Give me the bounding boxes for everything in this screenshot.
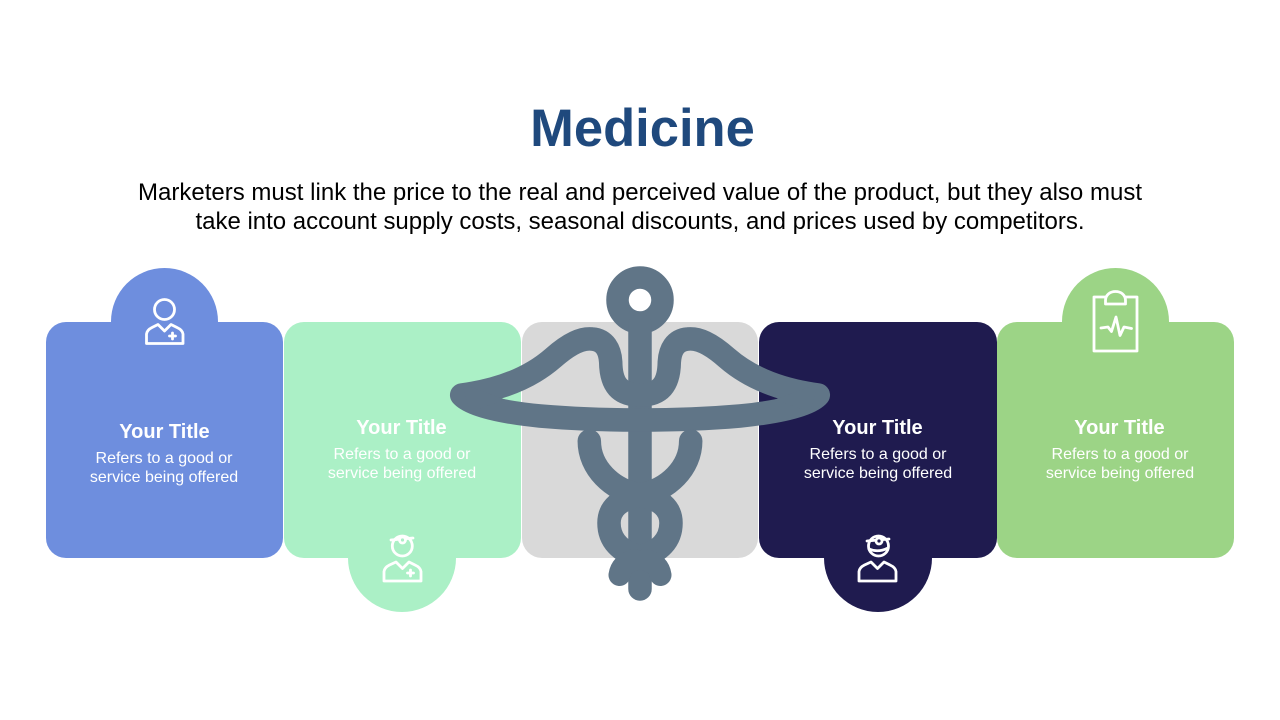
icon: nurse — [146, 300, 183, 344]
card text: service being offered — [328, 465, 476, 482]
card text: service being offered — [804, 465, 952, 482]
caduceus staff — [628, 325, 652, 589]
card text: service being offered — [90, 469, 238, 486]
icon: caduceus — [462, 278, 818, 589]
caduceus wings — [462, 339, 818, 420]
caduceus snake tails — [620, 560, 660, 575]
card text: Refers to a good or — [334, 446, 471, 463]
card text: Refers to a good or — [96, 450, 233, 467]
intro text — [138, 179, 1142, 235]
caduceus snakes — [589, 441, 691, 557]
card title: Your Title — [356, 417, 447, 439]
panel: mint card — [284, 322, 521, 612]
icon: doctor — [384, 536, 421, 581]
caduceus wing tips — [462, 384, 818, 412]
intro text: Marketers must link the price to the real and perceived value of the product, but they also must — [138, 179, 1142, 206]
card title: Your Title — [832, 417, 923, 439]
icon: clipboard with pulse — [1094, 292, 1137, 351]
card text — [90, 450, 238, 486]
panel: navy card — [759, 322, 997, 612]
title: Medicine — [530, 99, 755, 158]
card text: Refers to a good or — [810, 446, 947, 463]
card title: Your Title — [119, 421, 210, 443]
card text: Refers to a good or — [1052, 446, 1189, 463]
panel: blue card — [46, 268, 283, 558]
caduceus orb — [618, 278, 662, 322]
card text: service being offered — [1046, 465, 1194, 482]
card text — [328, 446, 476, 482]
panel: grey centre card — [522, 322, 758, 558]
icon: surgeon — [859, 536, 896, 581]
card title: Your Title — [1074, 417, 1165, 439]
panel: green card — [997, 268, 1234, 558]
intro text: take into account supply costs, seasonal discounts, and prices used by competitors. — [196, 208, 1084, 235]
card text — [1046, 446, 1194, 482]
card text — [804, 446, 952, 482]
